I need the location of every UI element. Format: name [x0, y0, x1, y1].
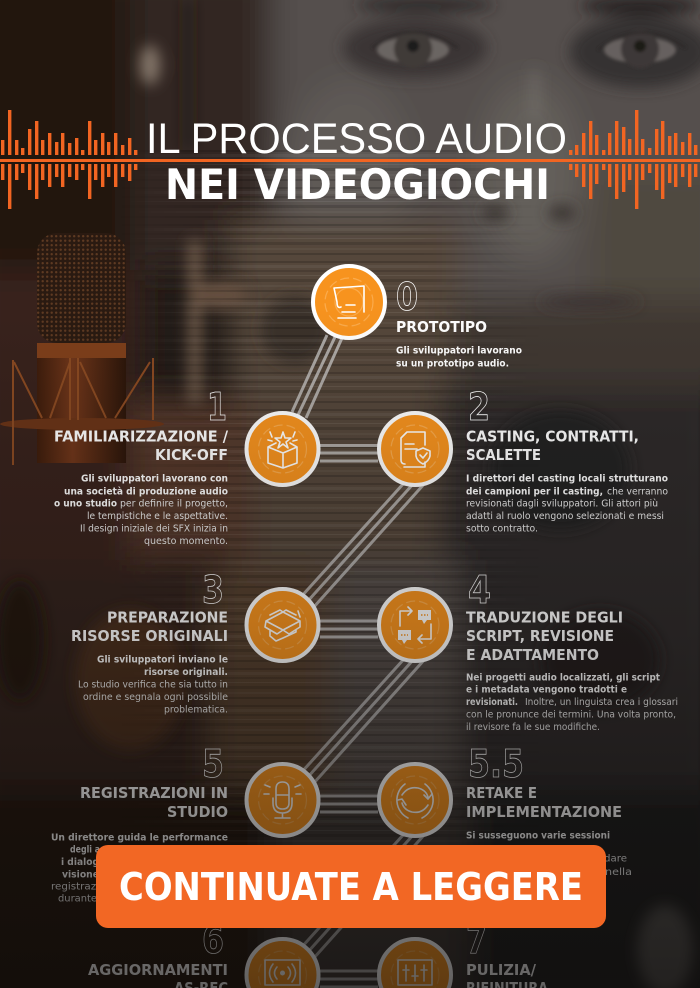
heading: [54, 428, 228, 464]
number 6: 6: [202, 918, 224, 962]
number 5.5: 5.5: [468, 742, 524, 786]
background microphone: [0, 233, 164, 465]
heading: E ADATTAMENTO: [466, 646, 599, 664]
heading: [88, 961, 228, 988]
body text: questo momento.: [144, 536, 228, 547]
number 1: 1: [207, 385, 227, 429]
step 5.5: retake: [379, 742, 632, 878]
body text: degli a: [70, 845, 100, 856]
number 5: 5: [202, 742, 224, 786]
step 2: casting: [379, 385, 668, 535]
heading: RETAKE E: [466, 784, 537, 802]
body text: sotto contratto.: [466, 524, 538, 535]
call to action button: [96, 845, 606, 928]
circle icon: arrows and speech bubbles: [379, 589, 451, 661]
body text: [466, 474, 668, 535]
heading: PROTOTIPO: [396, 318, 487, 336]
body text: Un direttore guida le performance: [51, 833, 228, 844]
body text: dei campioni per il casting,: [466, 486, 603, 497]
body text: che verranno: [607, 486, 668, 497]
title block with waveforms: [0, 110, 700, 209]
step 3: preparazione: [71, 568, 318, 716]
heading: TRADUZIONE DEGLI: [466, 609, 623, 627]
body text: adatti al ruolo vengono selezionati e messi: [466, 511, 664, 522]
circle icon: microphone: [246, 764, 318, 836]
number 4: 4: [468, 568, 491, 612]
body text: una società di produzione audio: [64, 485, 228, 497]
body text: Lo studio verifica che sia tutto in: [78, 680, 228, 691]
heading: KICK-OFF: [155, 446, 228, 464]
body text: il revisore fa le sue modifiche.: [466, 722, 600, 733]
body text: revisionati.: [466, 697, 518, 708]
circle icon: monitor with sliders: [379, 939, 451, 988]
circle icon: open box: [246, 589, 318, 661]
body text: con le pronunce dei termini. Una volta pronto,: [466, 710, 676, 721]
connector lines: [292, 335, 425, 987]
body text: Inoltre, un linguista crea i glossari: [525, 697, 678, 708]
number 3: 3: [202, 568, 224, 612]
body text: Nei progetti audio localizzati, gli script: [466, 673, 660, 684]
body text: [78, 654, 228, 716]
body text: Si susseguono varie sessioni: [466, 831, 610, 842]
body text: [396, 346, 522, 370]
step 6: aggiornamenti: [88, 918, 318, 988]
body text: le tempistiche e le aspettative.: [87, 511, 228, 522]
body text: Gli sviluppatori lavorano: [396, 346, 522, 357]
heading: REGISTRAZIONI IN: [80, 784, 228, 802]
body text: visione: [62, 869, 99, 880]
body text: registrazi: [51, 882, 99, 892]
body text: per definire il progetto,: [120, 499, 228, 510]
step 4: traduzione: [379, 568, 678, 733]
waveform left: [0, 110, 700, 209]
circle icon: contract with shield: [379, 413, 451, 485]
body text: [54, 474, 228, 547]
heading: [466, 428, 639, 464]
body text: [51, 833, 228, 905]
step 0: prototipo: [313, 266, 522, 370]
body text: Gli sviluppatori lavorano con: [81, 474, 228, 485]
body text: [466, 831, 632, 878]
heading: AGGIORNAMENTI: [88, 961, 228, 979]
circle icon: document: [313, 266, 385, 338]
body text: e i metadata vengono tradotti e: [466, 685, 627, 696]
number 7: 7: [466, 918, 487, 962]
heading: SCALETTE: [466, 446, 541, 464]
heading: STUDIO: [167, 803, 228, 821]
body text: nella: [605, 867, 632, 878]
step 7: pulizia: [379, 918, 548, 988]
heading: FAMILIARIZZAZIONE /: [54, 428, 228, 446]
body text: problematica.: [164, 705, 228, 716]
heading: IMPLEMENTAZIONE: [466, 803, 622, 821]
heading: CASTING, CONTRATTI,: [466, 428, 639, 446]
heading: PULIZIA/: [466, 961, 536, 979]
body text: ordine e segnala ogni possibile: [83, 692, 228, 703]
heading: [466, 609, 623, 664]
heading: [466, 961, 548, 988]
circle icon: box with star: [246, 413, 318, 485]
body text: su un prototipo audio.: [396, 359, 509, 370]
body text: dare: [604, 854, 627, 865]
body text: Gli sviluppatori inviano le: [97, 654, 228, 665]
number 2: 2: [468, 385, 490, 429]
circle icon: monitor with signal: [246, 939, 318, 988]
heading: [466, 784, 622, 821]
body text: durante: [58, 894, 97, 905]
step 1: familiarizzazione: [54, 385, 318, 547]
number 0: 0: [396, 275, 418, 319]
heading: PREPARAZIONE: [107, 609, 228, 627]
body text: o uno studio: [54, 499, 117, 510]
heading: [80, 784, 228, 821]
body text: i dialog: [61, 857, 99, 868]
call to action button: CONTINUATE A LEGGERE: [119, 865, 583, 909]
body text: [466, 673, 678, 733]
body text: I direttori del casting locali strutturano: [466, 474, 668, 485]
body text: risorse originali.: [144, 667, 228, 678]
body text: revisionati dagli sviluppatori. Gli attori più: [466, 498, 658, 510]
title line 1: IL PROCESSO AUDIO: [146, 115, 567, 163]
step 5: registrazioni: [51, 742, 318, 905]
circle icon: rotating arrows: [379, 764, 451, 836]
title line 2: NEI VIDEOGIOCHI: [165, 160, 550, 209]
heading: RISORSE ORIGINALI: [71, 627, 228, 645]
heading: SCRIPT, REVISIONE: [466, 627, 614, 645]
waveform right: [569, 110, 697, 209]
body text: Il design iniziale dei SFX inizia in: [80, 524, 228, 535]
heading: [71, 609, 228, 645]
